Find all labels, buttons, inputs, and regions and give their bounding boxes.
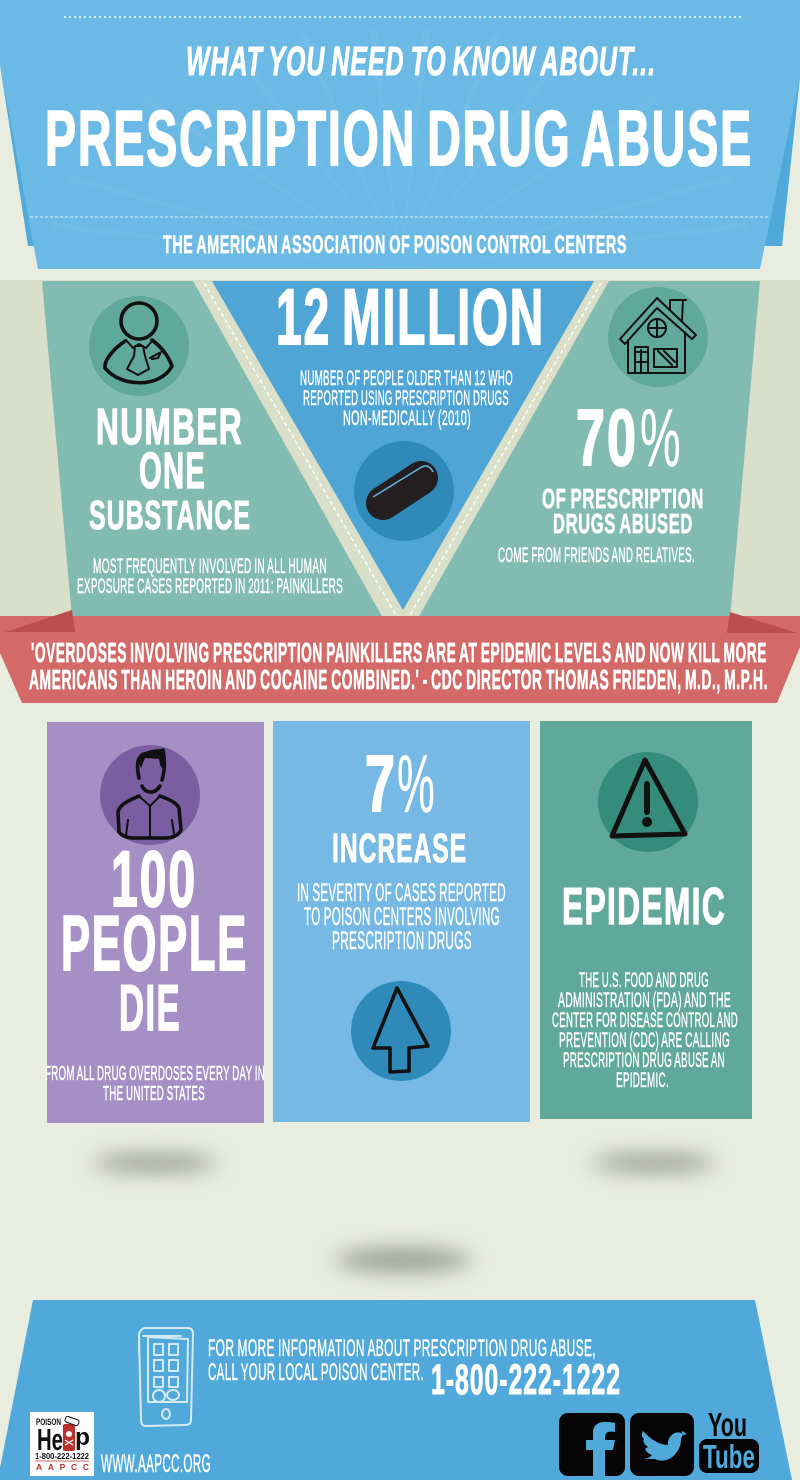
logo: poison help: He [37, 1422, 63, 1457]
panel: 7 percent increase: TO POISON CENTERS INVOLVING [304, 903, 500, 931]
panel: statistics triangle band: EXPOSURE CASES REPORTED IN 2011: PAINKILLERS [77, 575, 343, 598]
icon: person [100, 745, 200, 845]
icon: youtube: Tube [703, 1438, 755, 1475]
description [552, 969, 738, 1092]
heading: die: DIE [119, 971, 181, 1044]
big number: 7 [365, 739, 397, 828]
panel: epidemic [540, 721, 752, 1119]
big number: 100 [111, 834, 197, 923]
description: MOST FREQUENTLY INVOLVED IN ALL HUMAN [93, 555, 327, 578]
panel: quote ribbon [0, 610, 800, 703]
panel: 7 percent increase: IN SEVERITY OF CASES REPORTED [297, 879, 506, 907]
description [297, 879, 506, 955]
logo: poison help: AAPCC [36, 1462, 89, 1472]
icon: twitter [630, 1413, 694, 1476]
drop shadows [93, 1153, 716, 1273]
subheading [542, 483, 704, 539]
icon: house [608, 287, 708, 387]
description [300, 367, 513, 430]
panel: 7 percent increase [273, 721, 530, 1122]
big number [365, 739, 436, 830]
panel: 12 million: NUMBER OF PEOPLE OLDER THAN 12 WHO [300, 367, 513, 390]
description: THE UNITED STATES [103, 1083, 205, 1105]
panel: footer: WWW.AAPCC.ORG [101, 1450, 211, 1478]
panel: 100 people die [45, 722, 265, 1123]
big number: % [397, 739, 436, 830]
panel: statistics triangle band [0, 272, 800, 620]
icon: youtube [699, 1406, 759, 1475]
panel: 70 percent [498, 287, 708, 567]
heading: people: PEOPLE [61, 899, 248, 987]
infographic canvas: FROM ALL DRUG OVERDOSES EVERY DAY IN [45, 1063, 265, 1085]
description [77, 555, 343, 598]
description: PRESCRIPTION DRUGS [332, 927, 472, 955]
heading: number: NUMBER [96, 398, 243, 455]
logo: poison help: POISON [36, 1417, 61, 1427]
logo: poison help: 1-800-222-1222 [35, 1452, 90, 1461]
big number: 12 MILLION [276, 272, 545, 361]
panel: number one substance [77, 296, 343, 598]
icon: facebook [559, 1413, 625, 1476]
icon: pill [354, 441, 454, 541]
big number: % [640, 393, 682, 484]
icon: up arrow [351, 981, 451, 1081]
panel: 12 million [276, 272, 545, 541]
quote text [29, 637, 768, 695]
panel: 12 million: REPORTED USING PRESCRIPTION DRUGS [303, 387, 509, 410]
description: NON-MEDICALLY (2010) [343, 407, 471, 430]
heading: one: ONE [139, 442, 206, 499]
description: EPIDEMIC. [616, 1069, 669, 1092]
heading: increase: INCREASE [332, 825, 467, 871]
header banner [0, 0, 800, 269]
description [45, 1063, 265, 1105]
call to action text [208, 1335, 596, 1386]
panel: footer [0, 1300, 792, 1480]
icon: man with tie [89, 296, 189, 396]
subheading: DRUGS ABUSED [553, 508, 693, 539]
logo: poison help [30, 1412, 94, 1476]
logo: poison help: p [75, 1424, 90, 1451]
icon: smartphone [139, 1328, 193, 1426]
call to action text: CALL YOUR LOCAL POISON CENTER. [208, 1359, 424, 1386]
icon: youtube: You [708, 1406, 747, 1443]
phone number: 1-800-222-1222 [431, 1356, 621, 1404]
heading: substance: SUBSTANCE [89, 492, 251, 538]
icon: warning triangle [598, 752, 698, 852]
big number: 70 [576, 393, 638, 482]
